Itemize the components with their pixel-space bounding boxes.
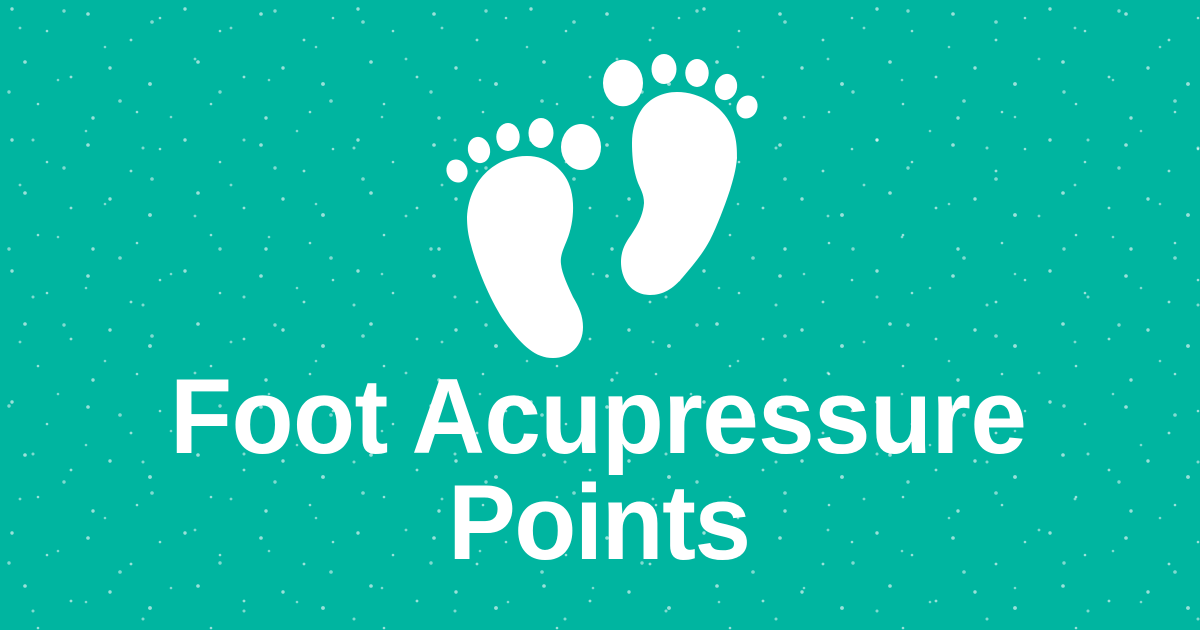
title: Foot Acupressure <box>170 358 1027 477</box>
icon: right footprint <box>603 54 761 295</box>
title: Points <box>448 464 751 583</box>
title <box>170 358 1027 583</box>
icon: left footprint <box>443 118 601 358</box>
